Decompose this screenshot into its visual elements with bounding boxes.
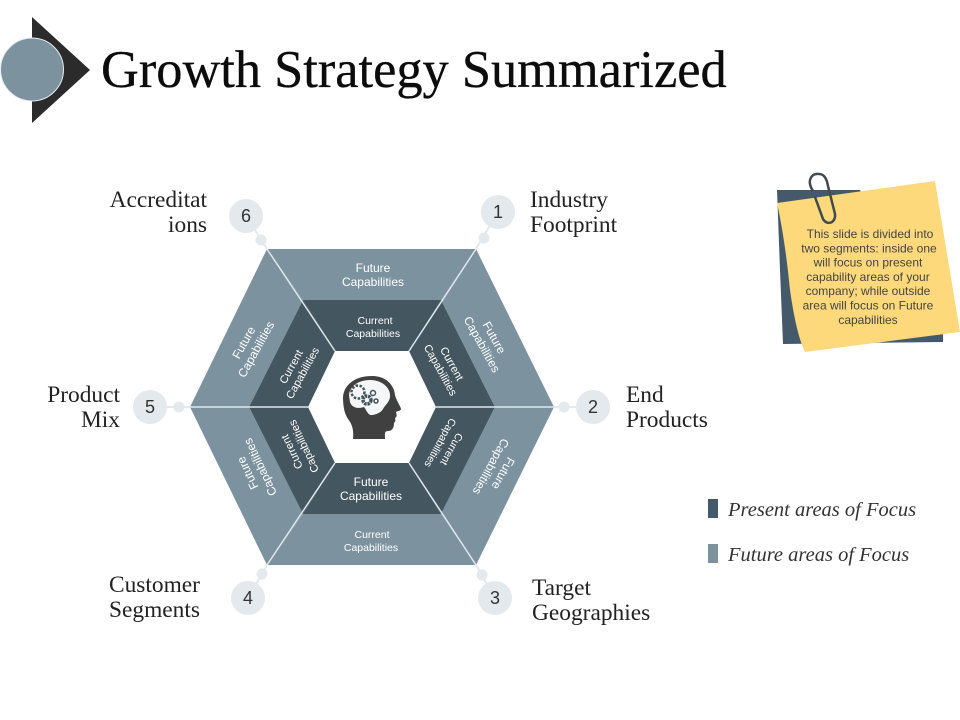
label: top current: Current	[357, 315, 393, 327]
icon: paper clip	[810, 174, 835, 223]
label: Accreditations: Accreditat	[110, 187, 207, 213]
label: upper right current: Current	[437, 345, 465, 383]
label: Industry Footprint: Footprint	[530, 212, 618, 238]
label: Industry Footprint: Industry	[530, 187, 608, 213]
segment: lower right future	[441, 407, 554, 565]
badge 2: 2	[588, 397, 598, 417]
label: top current: Capabilities	[346, 328, 400, 340]
label: top future: Future	[356, 261, 390, 275]
badge 1: 1	[493, 202, 503, 222]
label: upper right future: Capabilities	[461, 314, 503, 375]
badge 2	[554, 390, 610, 424]
legend text: present: Present areas of Focus	[727, 499, 916, 521]
label: bottom outer: Capabilities	[344, 542, 398, 554]
note text: will focus on present	[813, 256, 923, 270]
note back sheet	[777, 190, 943, 344]
label: Product Mix: Product	[47, 382, 120, 408]
segment: lower left current	[249, 407, 335, 514]
note text: area will focus on Future	[803, 298, 934, 312]
label: Target Geographies: Target	[532, 575, 591, 601]
badge 5: 5	[145, 397, 155, 417]
badge 1	[476, 195, 515, 249]
label: Accreditations: ions	[168, 212, 207, 238]
label: upper left current: Current	[278, 348, 306, 386]
badge 4: 4	[243, 588, 253, 608]
label: Product Mix: Mix	[81, 407, 120, 433]
segment: top future	[267, 249, 476, 300]
badge 6: 6	[241, 206, 251, 226]
legend	[708, 499, 916, 566]
label: End Products: End	[626, 382, 664, 408]
label: bottom outer: Current	[354, 529, 390, 541]
label: lower right current: Current	[438, 431, 465, 467]
segment: upper left future	[190, 249, 303, 407]
legend swatch: present	[708, 499, 718, 518]
label: lower left current: Capabilities	[287, 417, 322, 474]
hexagon diagram	[190, 249, 554, 565]
label: upper left future: Future	[229, 324, 258, 361]
icon: head with gears	[343, 376, 401, 439]
note text: company; while outside	[806, 284, 931, 298]
label: upper left current: Capabilities	[284, 345, 322, 401]
label: lower left current: Current	[279, 432, 306, 471]
header icon	[0, 17, 90, 123]
segment: lower right current	[409, 407, 495, 514]
connector nodes and numbers	[133, 195, 610, 615]
label: upper left future: Capabilities	[235, 319, 277, 380]
sticky note	[777, 174, 960, 352]
note front sheet	[777, 181, 960, 352]
label: lower left future: Capabilities	[241, 436, 280, 498]
label: lower left future: Future	[234, 454, 261, 492]
segment: top current	[303, 300, 441, 351]
segment: lower left future	[190, 407, 303, 565]
segment: bottom current outer	[267, 514, 476, 565]
legend text: future: Future areas of Focus	[727, 544, 909, 566]
label: bottom inner: Future	[354, 475, 388, 489]
segment: upper right current	[409, 300, 495, 407]
label: Customer Segments: Customer	[109, 572, 200, 598]
note text: two segments: inside one	[801, 241, 937, 255]
badge 6	[229, 199, 267, 249]
title: Growth Strategy Summarized	[101, 41, 727, 99]
label: Customer Segments: Segments	[109, 597, 200, 623]
note text: capability areas of your	[806, 270, 930, 284]
label: lower right current: Capabilities	[421, 416, 458, 469]
label: End Products: Products	[626, 407, 708, 433]
note text: capabilities	[838, 313, 898, 327]
badge 3: 3	[490, 588, 500, 608]
label: lower right future: Future	[489, 455, 518, 492]
badge 4	[231, 565, 268, 615]
note text: This slide is divided into	[807, 227, 933, 241]
label: upper right current: Capabilities	[421, 343, 459, 399]
segment: upper right future	[441, 249, 554, 407]
label: Target Geographies: Geographies	[532, 600, 650, 626]
legend swatch: future	[708, 544, 718, 563]
label: upper right future: Future	[480, 319, 509, 356]
label: bottom inner: Capabilities	[340, 489, 402, 503]
badge 5	[133, 390, 190, 424]
label: top future: Capabilities	[342, 275, 404, 289]
segment: bottom future inner	[303, 463, 441, 514]
label: lower right future: Capabilities	[470, 436, 512, 497]
segment: upper left current	[249, 300, 335, 407]
badge 3	[476, 565, 512, 615]
divider lines	[190, 249, 554, 565]
